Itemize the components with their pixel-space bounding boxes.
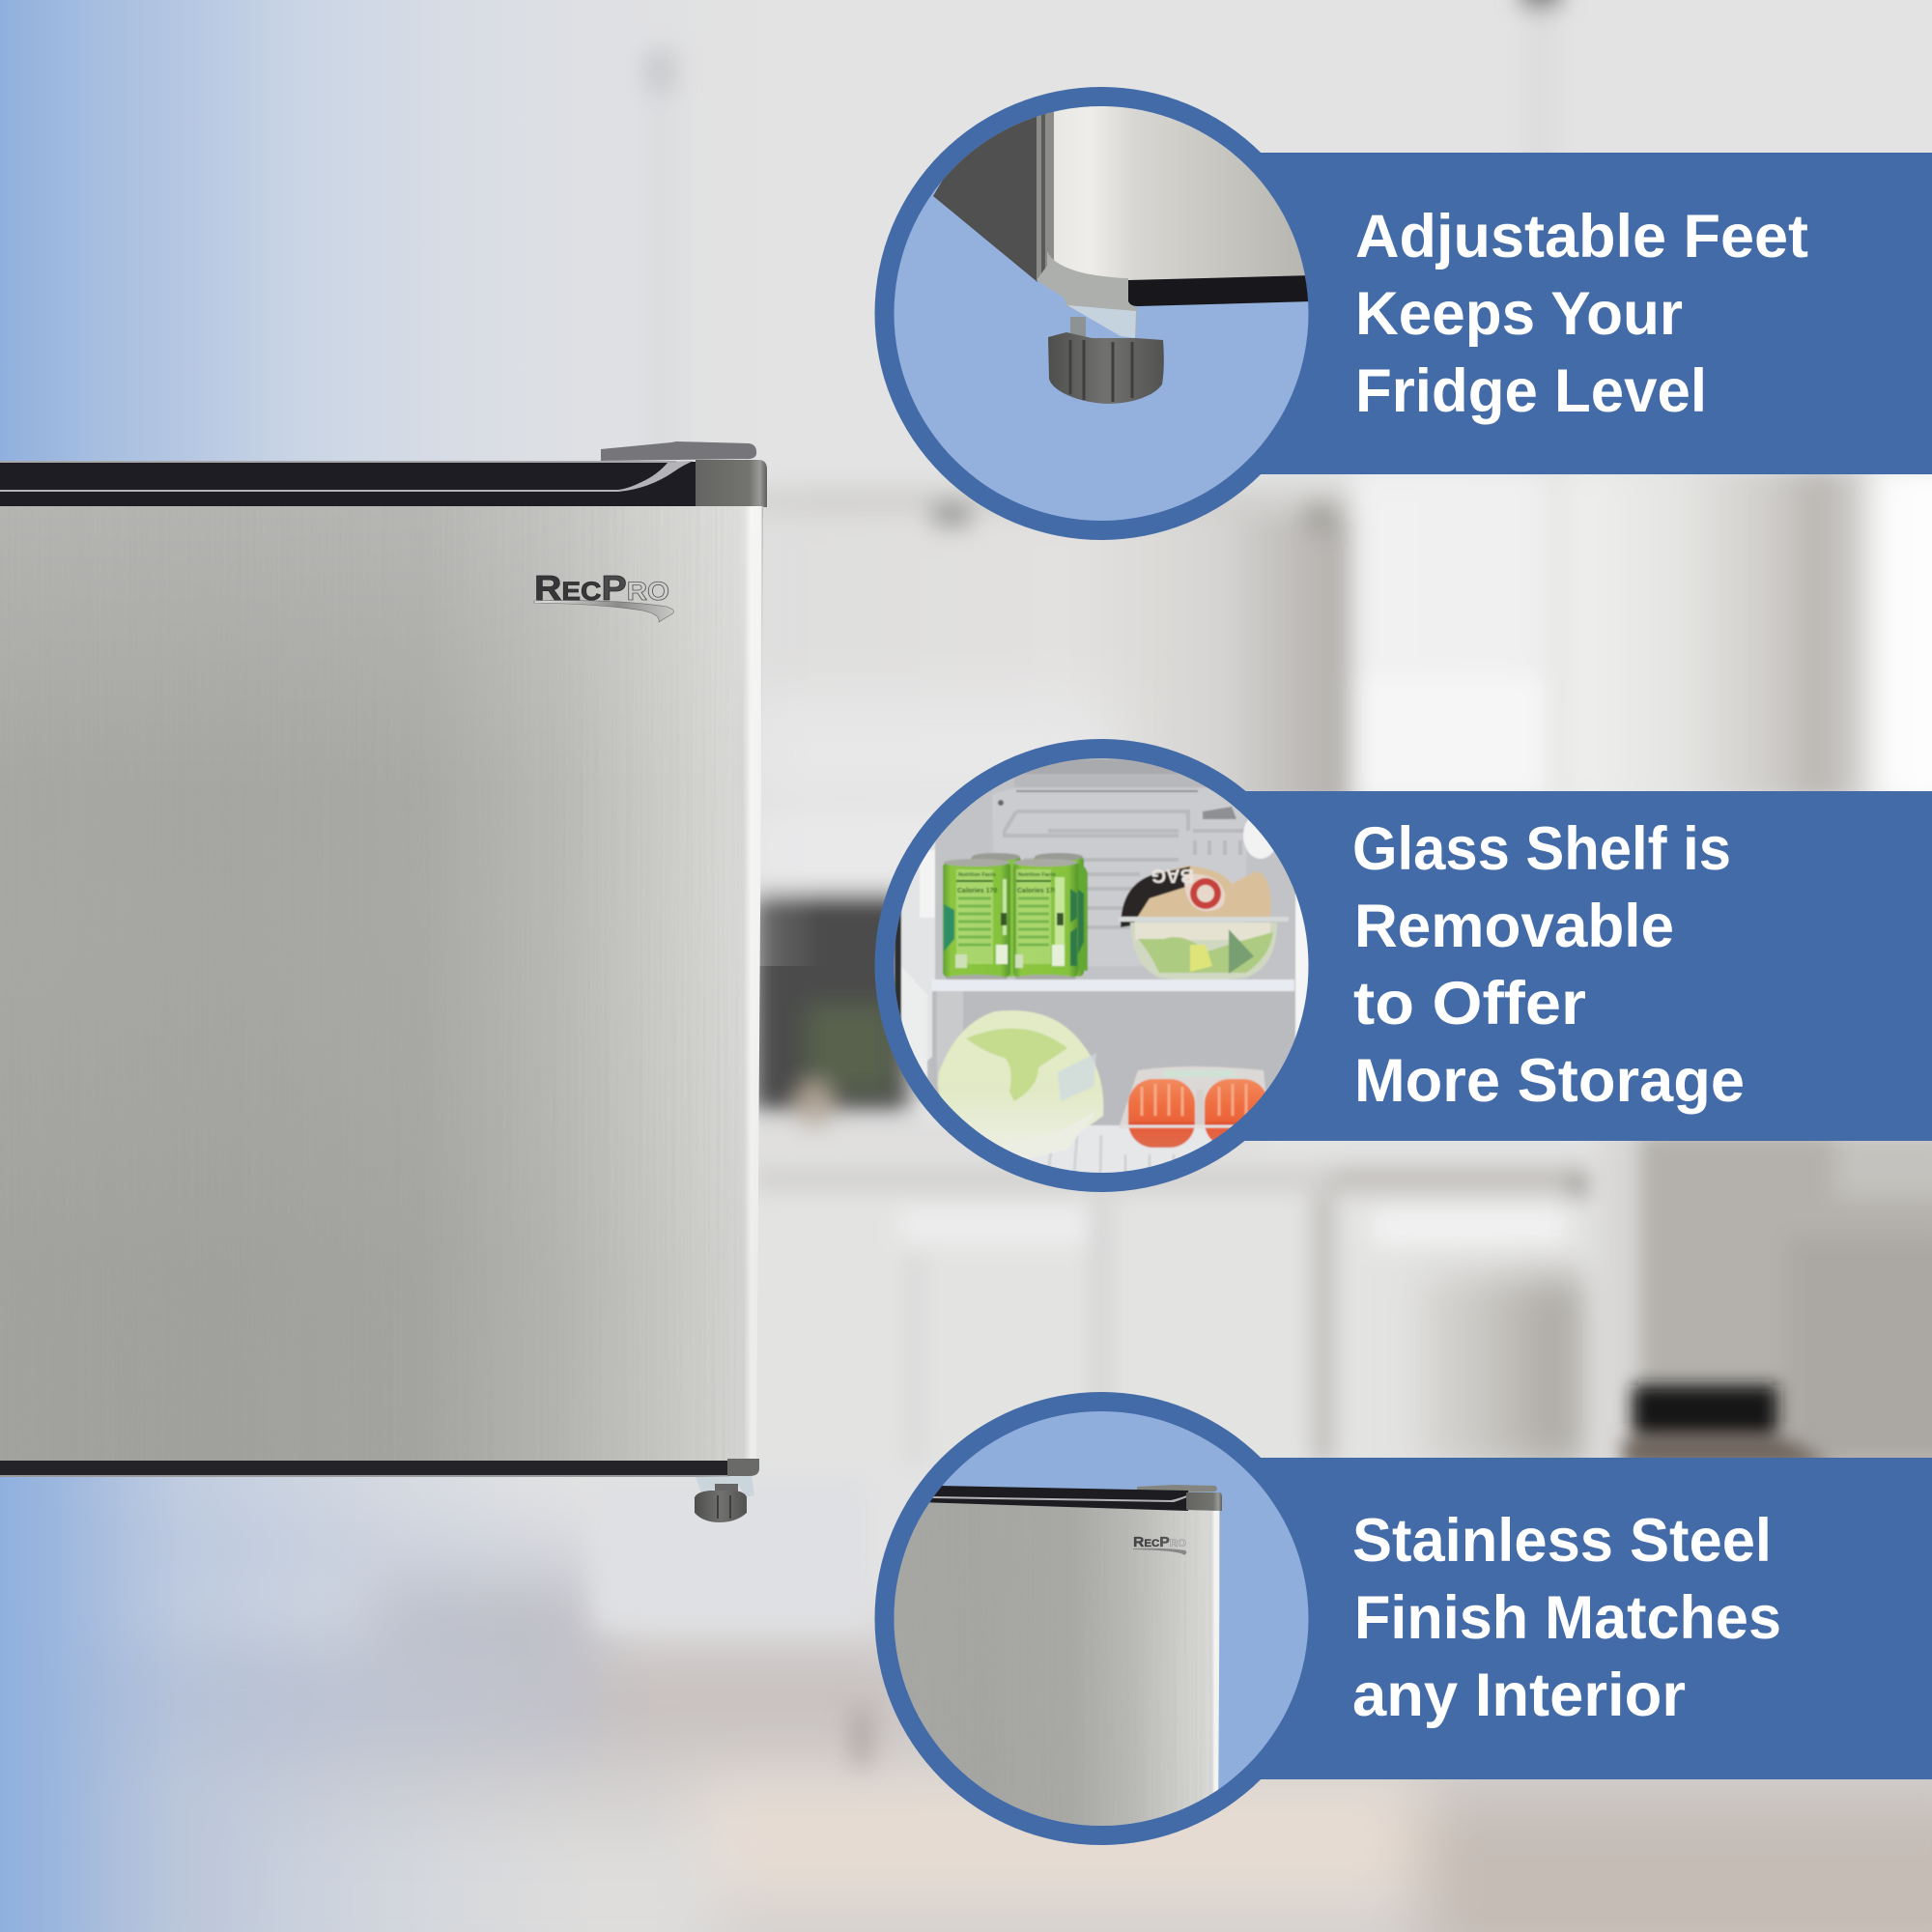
heading text: More Storage — [1354, 1047, 1745, 1115]
heading text — [1352, 1507, 1781, 1729]
fridge hinge — [601, 441, 756, 461]
feature: glass shelf — [875, 739, 1932, 1192]
feature: stainless steel finish — [875, 1392, 1932, 1845]
circle ring — [875, 739, 1327, 1192]
heading text: Stainless Steel — [1352, 1507, 1772, 1575]
fridge door steel panel — [0, 506, 763, 1461]
label bar — [1236, 791, 1932, 1141]
fridge bottom black trim — [0, 1461, 729, 1476]
front can right — [1013, 859, 1078, 982]
corner cap — [1186, 1492, 1222, 1511]
front can left: Nutrition Facts — [958, 872, 996, 878]
hinge — [1137, 1485, 1217, 1493]
lower compartment — [931, 991, 937, 1057]
fridge top corner cap — [696, 460, 767, 507]
label bar — [1256, 153, 1932, 474]
ceiling — [1023, 759, 1179, 775]
heading text: to Offer — [1353, 970, 1586, 1037]
RecPro logo: RECPRO — [534, 568, 669, 608]
fridge side panel — [933, 106, 1037, 282]
bottom floor — [1005, 1124, 1213, 1173]
fridge top black trim — [0, 462, 697, 506]
tomato container — [1119, 1066, 1269, 1148]
front can right: Calories 170 — [1017, 888, 1057, 895]
fridge steel corner — [1054, 97, 1315, 282]
small RecPro logo: RECPRO — [1133, 1534, 1186, 1550]
door steel panel — [889, 1500, 1220, 1835]
lettuce — [938, 1010, 1103, 1159]
heading text: any Interior — [1352, 1662, 1686, 1729]
RecPro logo — [534, 568, 674, 622]
main fridge — [0, 441, 767, 1522]
feature: adjustable feet — [875, 87, 1932, 540]
circle photo: fridge foot closeup — [889, 97, 1323, 531]
front can right: Nutrition Facts — [1018, 872, 1056, 878]
heading text: Keeps Your — [1355, 280, 1683, 348]
heading text: Finish Matches — [1354, 1584, 1781, 1652]
heading text: Adjustable Feet — [1355, 203, 1808, 270]
cooling plate — [992, 788, 1246, 966]
front can left — [943, 859, 1010, 982]
heading text: Removable — [1354, 893, 1674, 960]
right wall — [1294, 894, 1308, 1039]
dial — [1242, 819, 1274, 860]
fridge bottom corner — [727, 1459, 759, 1476]
front can left: Calories 170 — [957, 888, 997, 895]
inner back wall — [935, 838, 937, 980]
top black trim — [889, 1485, 1188, 1511]
adjustable foot — [695, 1476, 754, 1522]
bagel bag: BAG — [1151, 865, 1194, 886]
circle ring — [875, 87, 1327, 540]
bracket — [1037, 251, 1137, 334]
adjustable foot — [1048, 332, 1164, 404]
circle ring — [875, 1392, 1327, 1845]
salad bowl — [1119, 917, 1289, 980]
circle photo: fridge door — [889, 1401, 1323, 1835]
heading text — [1355, 203, 1808, 425]
foot stem — [1070, 317, 1086, 338]
fridge trim highlight — [0, 461, 694, 492]
black door trim — [1128, 275, 1314, 306]
heading text: Fridge Level — [1355, 357, 1707, 425]
glass shelf — [932, 980, 1294, 991]
label bar — [1256, 1458, 1932, 1779]
heading text — [1352, 815, 1745, 1115]
left wall — [900, 841, 935, 1061]
circle photo: fridge interior — [889, 753, 1323, 1179]
bagel bag — [1121, 865, 1270, 927]
back cans — [971, 853, 1088, 977]
heading text: Glass Shelf is — [1352, 815, 1731, 883]
